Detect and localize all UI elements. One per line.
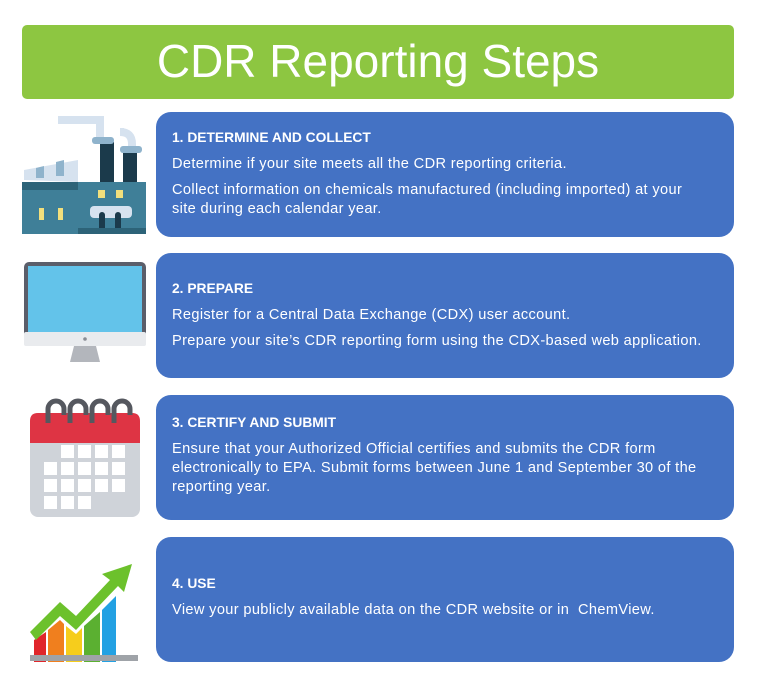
panel: step 1: 1. DETERMINE AND COLLECT — [172, 130, 371, 145]
panel: step 1: site during each calendar year. — [172, 201, 382, 217]
panel: step 1 — [156, 112, 734, 237]
panel: step 2 — [156, 253, 734, 378]
icon: calendar — [30, 398, 140, 517]
panel: step 2: Prepare your site’s CDR reporting form using the CDX-based web application. — [172, 333, 702, 349]
panel: step 3: electronically to EPA. Submit forms between June 1 and September 30 of the — [172, 460, 697, 476]
panel: step 3: 3. CERTIFY AND SUBMIT — [172, 415, 336, 430]
icon: growth chart — [30, 564, 138, 662]
panel: step 2: 2. PREPARE — [172, 281, 253, 296]
panel: step 3: reporting year. — [172, 479, 271, 495]
panel: step 2: Register for a Central Data Exchange (CDX) user account. — [172, 307, 570, 323]
icon: factory — [22, 116, 146, 234]
panel: step 1: Collect information on chemicals manufactured (including imported) at your — [172, 182, 682, 198]
panel: step 3: Ensure that your Authorized Official certifies and submits the CDR form — [172, 441, 656, 457]
panel: step 4: 4. USE — [172, 576, 216, 591]
icon: monitor — [24, 262, 146, 362]
title: CDR Reporting Steps — [157, 35, 599, 87]
panel: step 3 — [156, 395, 734, 520]
panel: step 1: Determine if your site meets all the CDR reporting criteria. — [172, 156, 567, 172]
panel: step 4: View your publicly available data on the CDR website or in ChemView. — [172, 602, 655, 618]
panel: step 4 — [156, 537, 734, 662]
title — [22, 25, 734, 99]
